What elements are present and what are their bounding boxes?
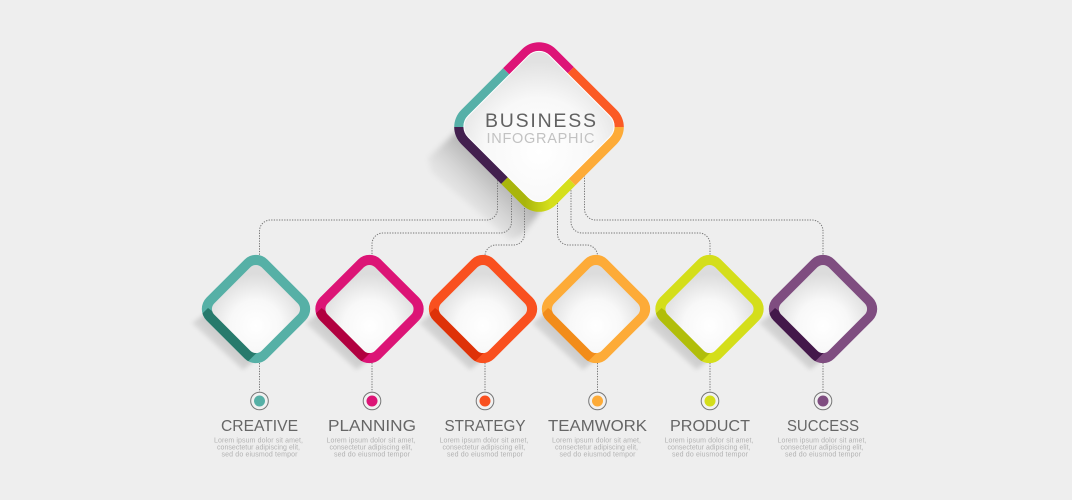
diamond: success bbox=[757, 254, 878, 370]
diamond: planning bbox=[304, 254, 424, 370]
diamond: product bbox=[644, 254, 764, 370]
main diamond: business infographic bbox=[454, 42, 624, 212]
label: success: SUCCESS bbox=[787, 418, 859, 435]
connector lines bbox=[260, 170, 823, 255]
label: creative: CREATIVE bbox=[221, 418, 298, 435]
main heading: BUSINESS bbox=[485, 110, 596, 132]
description: teamwork: consectetur adipiscing elit, bbox=[555, 444, 638, 452]
description: teamwork bbox=[552, 438, 641, 458]
description: planning: sed do eiusmod tempor bbox=[334, 452, 411, 458]
label: planning: PLANNING bbox=[328, 418, 416, 435]
item 6: success bbox=[754, 249, 883, 458]
description: product: consectetur adipiscing elit, bbox=[668, 444, 751, 452]
item 4: teamwork bbox=[526, 249, 656, 458]
description: planning bbox=[326, 438, 416, 458]
description: strategy: consectetur adipiscing elit, bbox=[442, 444, 526, 452]
diamond: strategy bbox=[417, 254, 538, 370]
description: planning: Lorem ipsum dolor sit amet, bbox=[326, 438, 416, 444]
item 2: planning bbox=[300, 249, 430, 458]
item 3: strategy bbox=[414, 249, 543, 458]
description: success: sed do eiusmod tempor bbox=[785, 452, 862, 458]
description: creative: Lorem ipsum dolor sit amet, bbox=[214, 438, 303, 444]
description: creative: consectetur adipiscing elit, bbox=[217, 444, 300, 452]
diamond: creative bbox=[193, 254, 310, 370]
description: strategy: sed do eiusmod tempor bbox=[447, 452, 524, 458]
label: teamwork: TEAMWORK bbox=[548, 418, 648, 435]
stem and marker: strategy bbox=[476, 363, 494, 410]
stem and marker: success bbox=[814, 363, 832, 410]
description: product: Lorem ipsum dolor sit amet, bbox=[664, 438, 754, 444]
main diamond inner panel bbox=[458, 45, 620, 208]
item 5: product bbox=[640, 249, 770, 458]
description: strategy bbox=[440, 438, 529, 458]
main diamond shadow bbox=[428, 130, 545, 240]
description: product: sed do eiusmod tempor bbox=[672, 452, 749, 458]
description: planning: consectetur adipiscing elit, bbox=[330, 444, 413, 452]
stem and marker: creative bbox=[251, 363, 268, 410]
item 1: creative bbox=[193, 254, 310, 458]
main subheading: INFOGRAPHIC bbox=[486, 131, 594, 147]
label: strategy: STRATEGY bbox=[444, 418, 526, 435]
description: strategy: Lorem ipsum dolor sit amet, bbox=[440, 438, 529, 444]
description: success: Lorem ipsum dolor sit amet, bbox=[778, 438, 867, 444]
description: success: consectetur adipiscing elit, bbox=[780, 444, 864, 452]
description: success bbox=[778, 438, 867, 458]
description: teamwork: sed do eiusmod tempor bbox=[560, 452, 636, 458]
stem and marker: teamwork bbox=[589, 363, 606, 410]
description: creative: sed do eiusmod tempor bbox=[222, 452, 298, 458]
label: product: PRODUCT bbox=[670, 418, 751, 435]
description: creative bbox=[214, 438, 303, 458]
diamond: teamwork bbox=[530, 254, 650, 370]
main diamond ring segments bbox=[454, 42, 624, 212]
description: teamwork: Lorem ipsum dolor sit amet, bbox=[552, 438, 641, 444]
stem and marker: product bbox=[701, 363, 719, 410]
description: product bbox=[664, 438, 754, 458]
stem and marker: planning bbox=[363, 363, 381, 410]
